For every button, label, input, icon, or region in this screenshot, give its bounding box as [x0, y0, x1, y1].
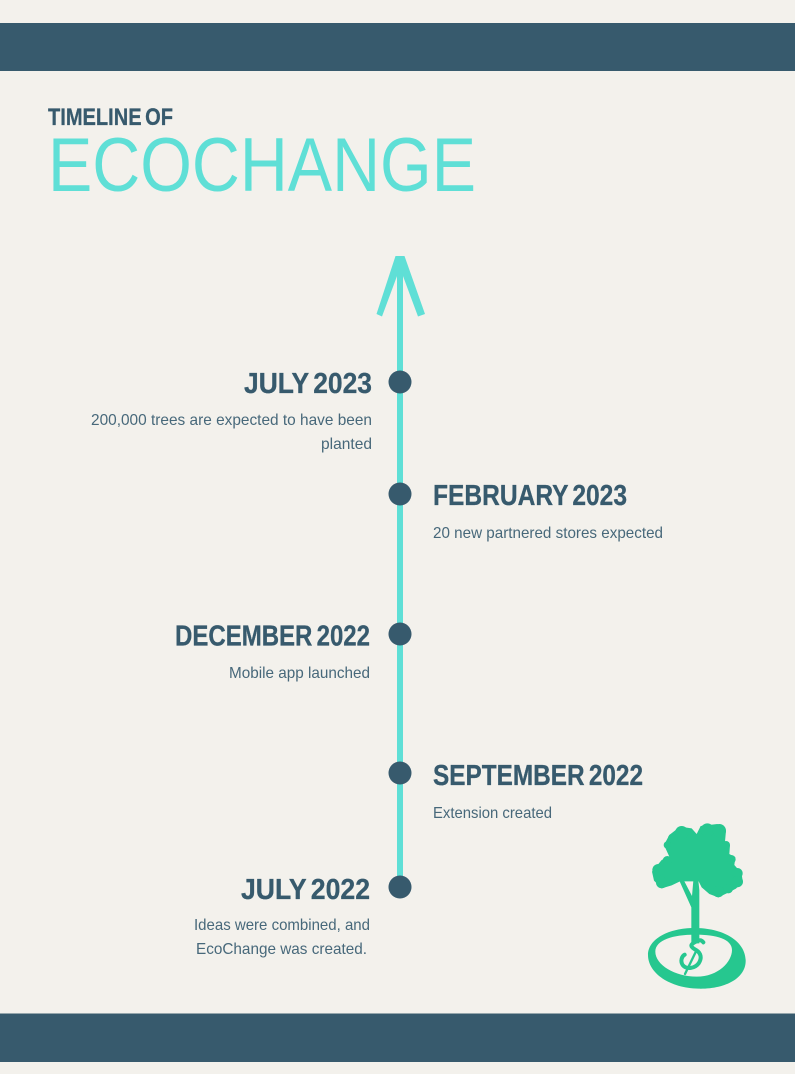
event: September 2022: Extension created: [433, 805, 552, 822]
tree crown: [652, 823, 743, 897]
title line: timeline of: TIMELINE OF: [48, 104, 173, 131]
timeline marker: December 2022: [388, 622, 412, 646]
event: July 2023: planted: [321, 436, 372, 453]
event: December 2022: [175, 620, 370, 682]
top banner: [0, 23, 795, 71]
event: February 2023: [433, 480, 663, 542]
bottom banner: [0, 1014, 795, 1062]
event: December 2022: DECEMBER 2022: [175, 620, 370, 652]
event: September 2022: [433, 760, 643, 822]
timeline marker: July 2023: [388, 370, 412, 394]
event: February 2023: FEBRUARY 2023: [433, 480, 627, 512]
event: July 2022: EcoChange was created.: [196, 941, 367, 958]
icon: ring: [648, 928, 746, 989]
timeline marker: July 2022: [388, 876, 412, 898]
trunk and branches: [679, 881, 699, 943]
event: July 2023: [91, 368, 372, 453]
title: [48, 104, 476, 208]
event: February 2023: 20 new partnered stores expected: [433, 525, 663, 542]
event: July 2022: Ideas were combined, and: [194, 917, 370, 934]
title line: ecochange: ECOCHANGE: [48, 123, 476, 208]
icon: tree with dollar root: [648, 823, 746, 989]
timeline arrow: [376, 256, 425, 887]
event: July 2022: JULY 2022: [241, 874, 370, 906]
event: December 2022: Mobile app launched: [229, 665, 370, 682]
event: September 2022: SEPTEMBER 2022: [433, 760, 643, 792]
event: July 2022: [194, 874, 370, 958]
event: July 2023: 200,000 trees are expected to have been: [91, 412, 372, 429]
timeline marker: February 2023: [388, 482, 412, 506]
event: July 2023: JULY 2023: [244, 368, 372, 400]
timeline marker: September 2022: [388, 762, 412, 784]
icon: dollar sign: [681, 940, 703, 974]
